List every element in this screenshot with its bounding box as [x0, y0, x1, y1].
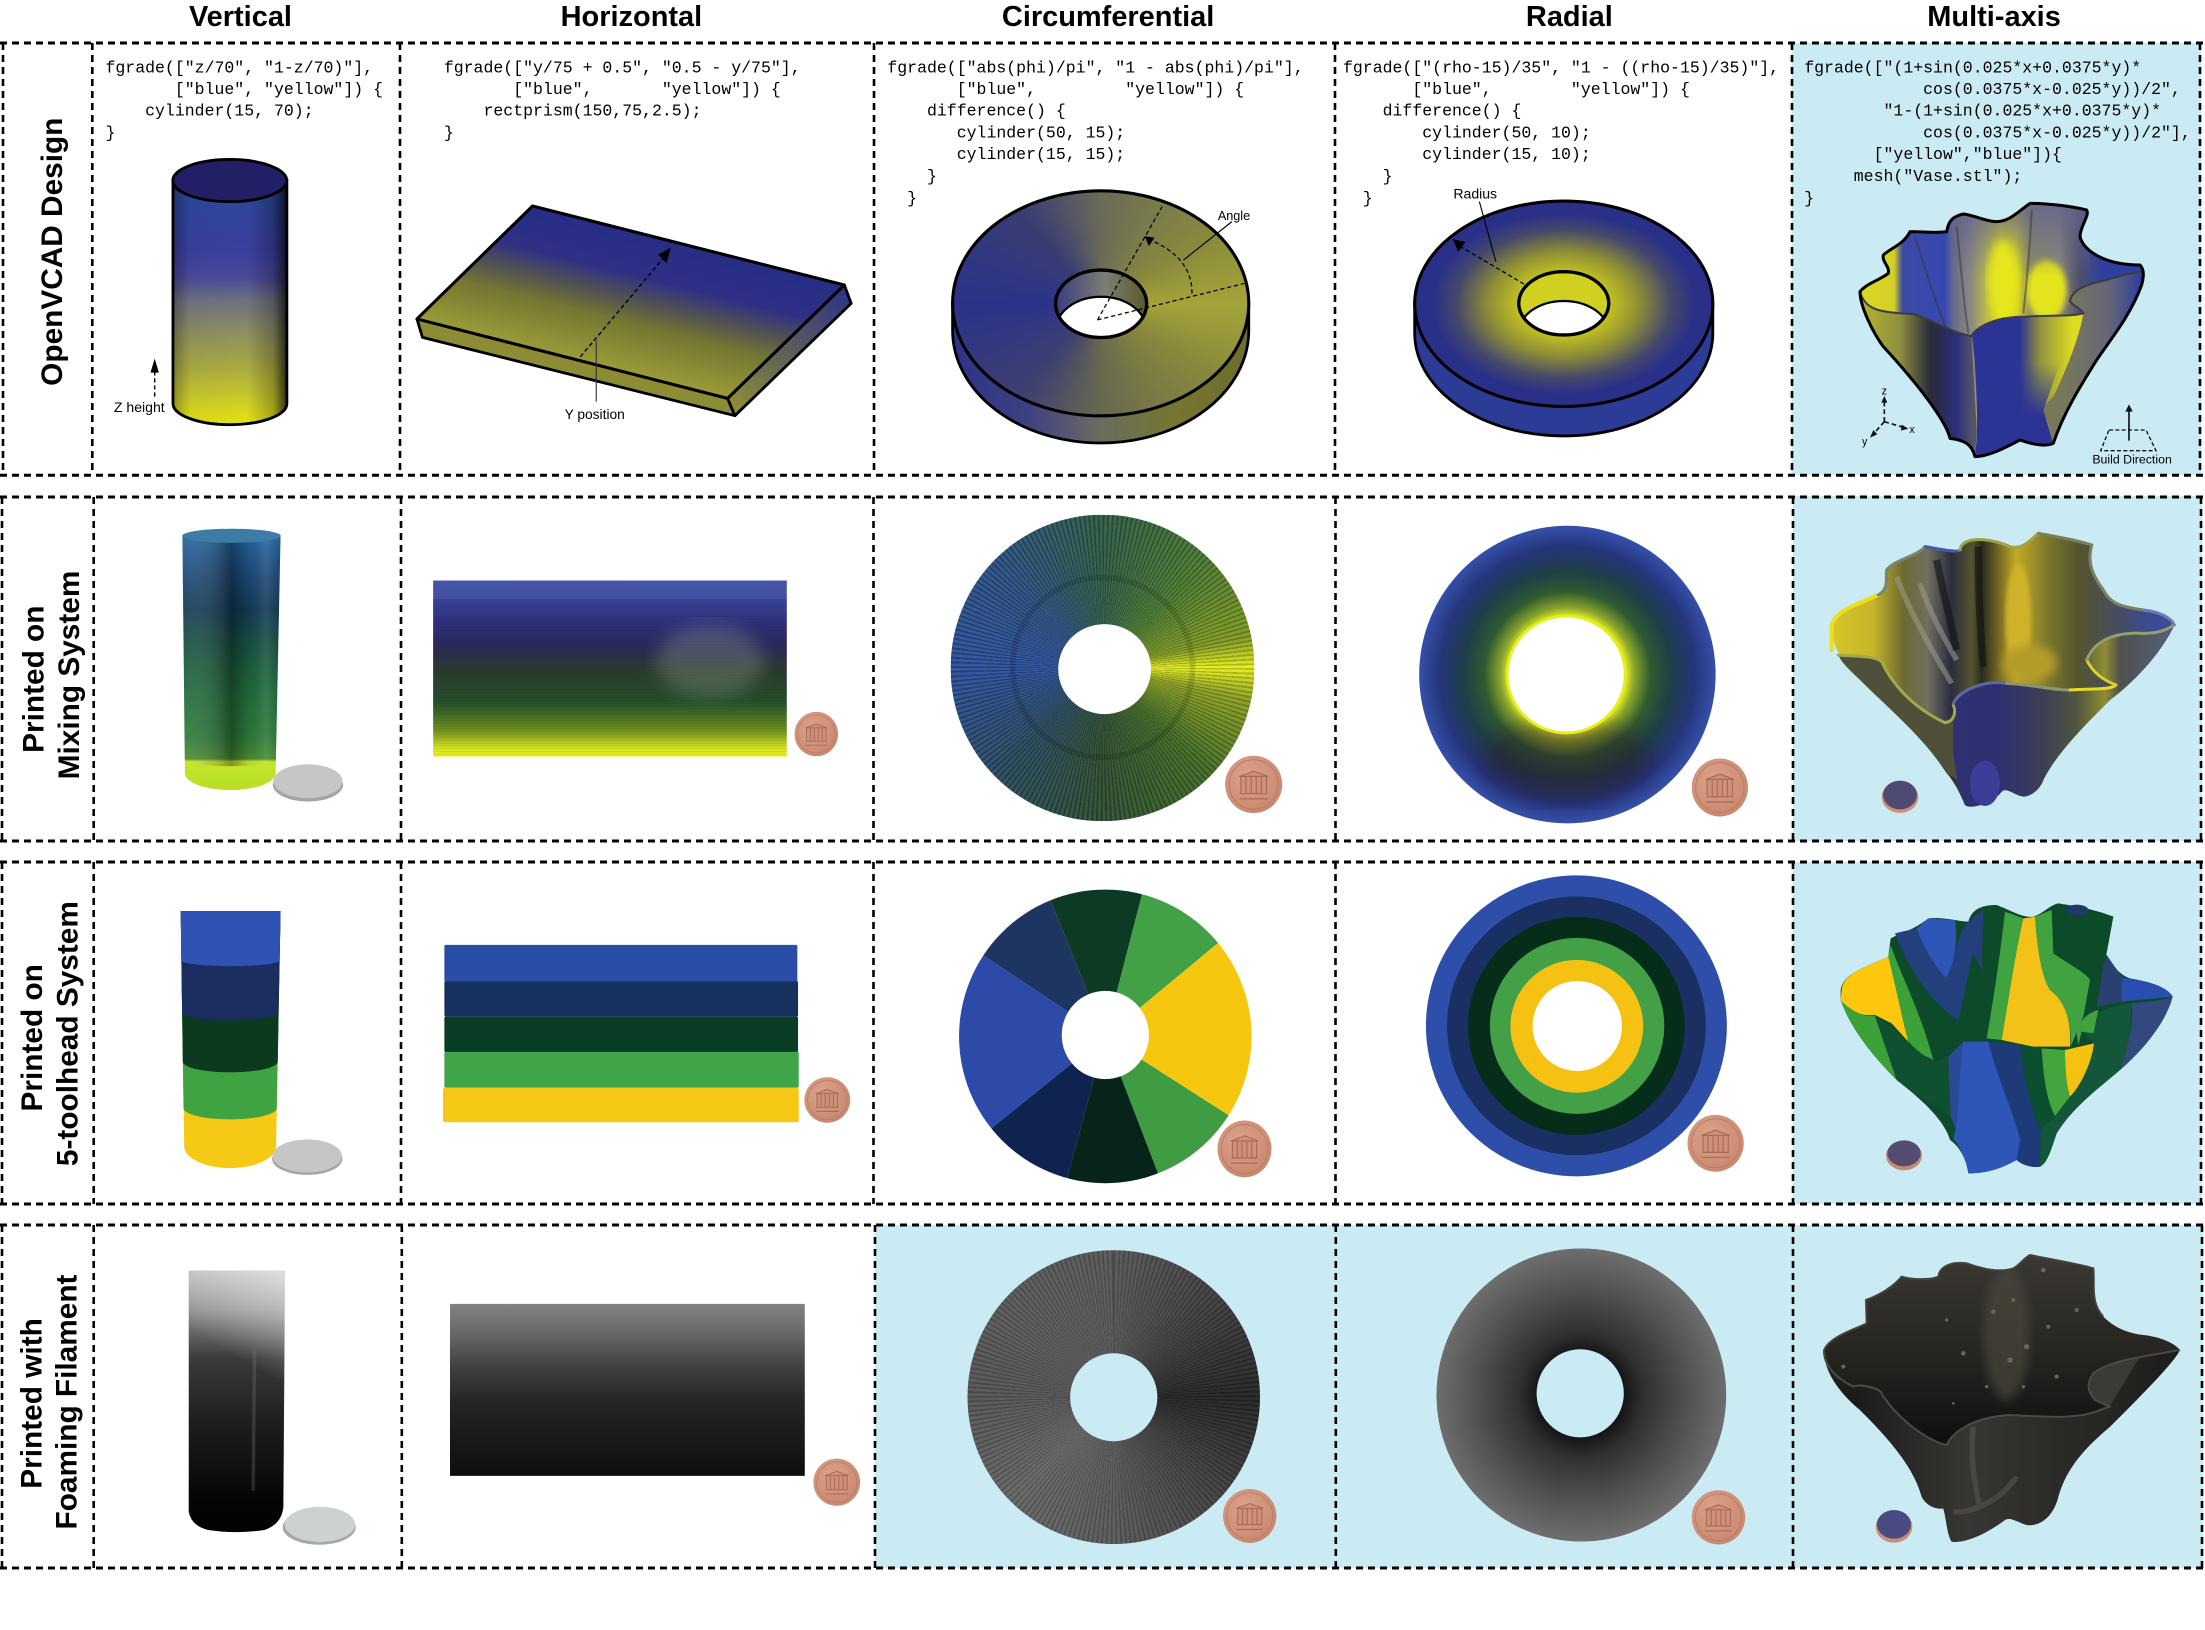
code: circumferential: }: [887, 167, 937, 186]
5-toolhead: vase: [1841, 903, 2173, 1173]
code: horizontal: }: [444, 124, 454, 143]
axes: x y z: x: [1909, 424, 1915, 436]
code: vertical: }: [105, 124, 115, 143]
axes: x y z: z: [1882, 385, 1887, 397]
code: circumferential: ["blue", "yellow"]) {: [887, 80, 1244, 99]
code: multi-axis: [1804, 58, 2191, 208]
code: radial: fgrade(["(rho-15)/35", "1 - ((rho-15)/35)"],: [1343, 58, 1779, 77]
code: multi-axis: ["yellow","blue"]){: [1804, 145, 2062, 164]
annotation: Radius: Radius: [1453, 185, 1497, 201]
icon: penny: [1692, 1490, 1745, 1544]
code: circumferential: [887, 58, 1304, 208]
code: multi-axis: cos(0.0375*x-0.025*y))/2"],: [1804, 124, 2191, 143]
code: vertical: [105, 58, 383, 143]
arrow: Z height: [114, 359, 165, 415]
5-toolhead: stacked slabs: [443, 945, 799, 1122]
design: graded slab: [417, 206, 851, 416]
5-toolhead: circumferential sectors: [959, 890, 1252, 1184]
row label: Printed with Foaming Filament: Foaming Filament: [51, 1274, 84, 1530]
column heading: Circumferential: Circumferential: [1002, 1, 1214, 33]
code: circumferential: cylinder(15, 15);: [887, 145, 1125, 164]
arrow: Z height: Z height: [114, 399, 165, 415]
foaming: slab: [450, 1304, 805, 1476]
code: vertical: cylinder(15, 70);: [105, 102, 314, 121]
code: horizontal: [444, 58, 801, 143]
column heading: Horizontal: Horizontal: [561, 1, 702, 33]
foaming: radial disc: [1436, 1248, 1726, 1542]
mixing system: vase: [1832, 533, 2174, 807]
icon: penny on vase photo: [1886, 1140, 1922, 1170]
coin: mixing cylinder: [273, 764, 343, 802]
code: multi-axis: cos(0.0375*x-0.025*y))/2",: [1804, 80, 2181, 99]
code: multi-axis: mesh("Vase.stl");: [1804, 167, 2022, 186]
coin: foaming cylinder: [283, 1507, 356, 1545]
row label: Printed on 5-toolhead System: [16, 901, 84, 1166]
5-toolhead: radial rings: [1426, 875, 1727, 1176]
column heading: Vertical: Vertical: [189, 1, 292, 33]
code: radial: cylinder(15, 10);: [1343, 145, 1591, 164]
annotation: Angle: [1097, 207, 1250, 320]
build direction indicator: Build Direction: [2092, 452, 2172, 466]
code: radial: difference() {: [1343, 102, 1521, 121]
row label: Printed with Foaming Filament: Printed with: [15, 1318, 48, 1489]
icon: penny: [795, 712, 838, 756]
panel backgrounds: [875, 43, 2203, 1568]
mixing system: slab: [433, 580, 787, 757]
code: radial: ["blue", "yellow"]) {: [1343, 80, 1690, 99]
code: circumferential: difference() {: [887, 102, 1066, 121]
annotation: Radius: [1453, 185, 1524, 284]
coin: 5-toolhead cylinder: [272, 1139, 342, 1175]
code: horizontal: fgrade(["y/75 + 0.5", "0.5 - y/75"],: [444, 58, 801, 77]
column heading: Radial: Radial: [1526, 1, 1613, 33]
mixing system: radial disc: [1419, 526, 1716, 823]
icon: penny: [1692, 759, 1748, 816]
mixing system: circumferential disc: [950, 514, 1255, 821]
5-toolhead: stacked cylinder: [181, 911, 281, 1168]
row label: Printed on Mixing System: [18, 571, 86, 779]
icon: penny: [1688, 1115, 1744, 1172]
arrow: Y position: [565, 248, 671, 422]
code: multi-axis: }: [1804, 189, 1814, 208]
icon: penny: [1223, 1489, 1276, 1543]
design: graded cylinder: [173, 159, 287, 425]
axes: x y z: y: [1862, 436, 1868, 448]
foaming: cylinder: [189, 1271, 285, 1532]
icon: penny on vase photo: [1876, 1510, 1912, 1543]
icon: penny on vase photo: [1882, 781, 1918, 813]
design: radial disc: [1415, 201, 1713, 436]
foaming: vase: [1824, 1255, 2180, 1542]
code: circumferential: }: [887, 189, 917, 208]
row label: Printed on Mixing System: Mixing System: [53, 571, 86, 779]
design: multi-axis vase: [1860, 203, 2143, 457]
mixing system: cylinder: [182, 529, 281, 790]
row label: Printed on 5-toolhead System: Printed on: [16, 964, 49, 1111]
icon: penny: [804, 1077, 850, 1123]
column heading: Multi-axis: Multi-axis: [1927, 1, 2061, 33]
row label: Printed with Foaming Filament: [15, 1274, 83, 1530]
code: horizontal: ["blue", "yellow"]) {: [444, 80, 781, 99]
code: multi-axis: "1-(1+sin(0.025*x+0.0375*y)*: [1804, 102, 2161, 121]
design: circumferential disc: [953, 191, 1249, 443]
code: vertical: fgrade(["z/70", "1-z/70)"],: [105, 58, 373, 77]
row label: Printed on 5-toolhead System: 5-toolhead System: [51, 901, 84, 1166]
code: circumferential: fgrade(["abs(phi)/pi", "1 - abs(phi)/pi"],: [887, 58, 1304, 77]
row label: Printed on Mixing System: Printed on: [18, 606, 51, 753]
code: radial: }: [1343, 189, 1373, 208]
annotation: Angle: Angle: [1218, 209, 1250, 223]
foaming: circumferential disc: [967, 1251, 1259, 1544]
build direction indicator: [2092, 404, 2172, 466]
code: multi-axis: fgrade(["(1+sin(0.025*x+0.0375*y)*: [1804, 58, 2141, 77]
code: radial: }: [1343, 167, 1393, 186]
code: radial: [1343, 58, 1779, 208]
code: radial: cylinder(50, 10);: [1343, 124, 1591, 143]
icon: penny: [813, 1459, 860, 1506]
row label: OpenVCAD Design: OpenVCAD Design: [36, 118, 69, 386]
arrow: Y position: Y position: [565, 407, 625, 422]
icon: penny: [1218, 1120, 1272, 1177]
code: circumferential: cylinder(50, 15);: [887, 124, 1125, 143]
axes: x y z: [1862, 385, 1915, 448]
code: vertical: ["blue", "yellow"]) {: [105, 80, 383, 99]
icon: penny: [1225, 756, 1282, 813]
code: horizontal: rectprism(150,75,2.5);: [444, 102, 702, 121]
